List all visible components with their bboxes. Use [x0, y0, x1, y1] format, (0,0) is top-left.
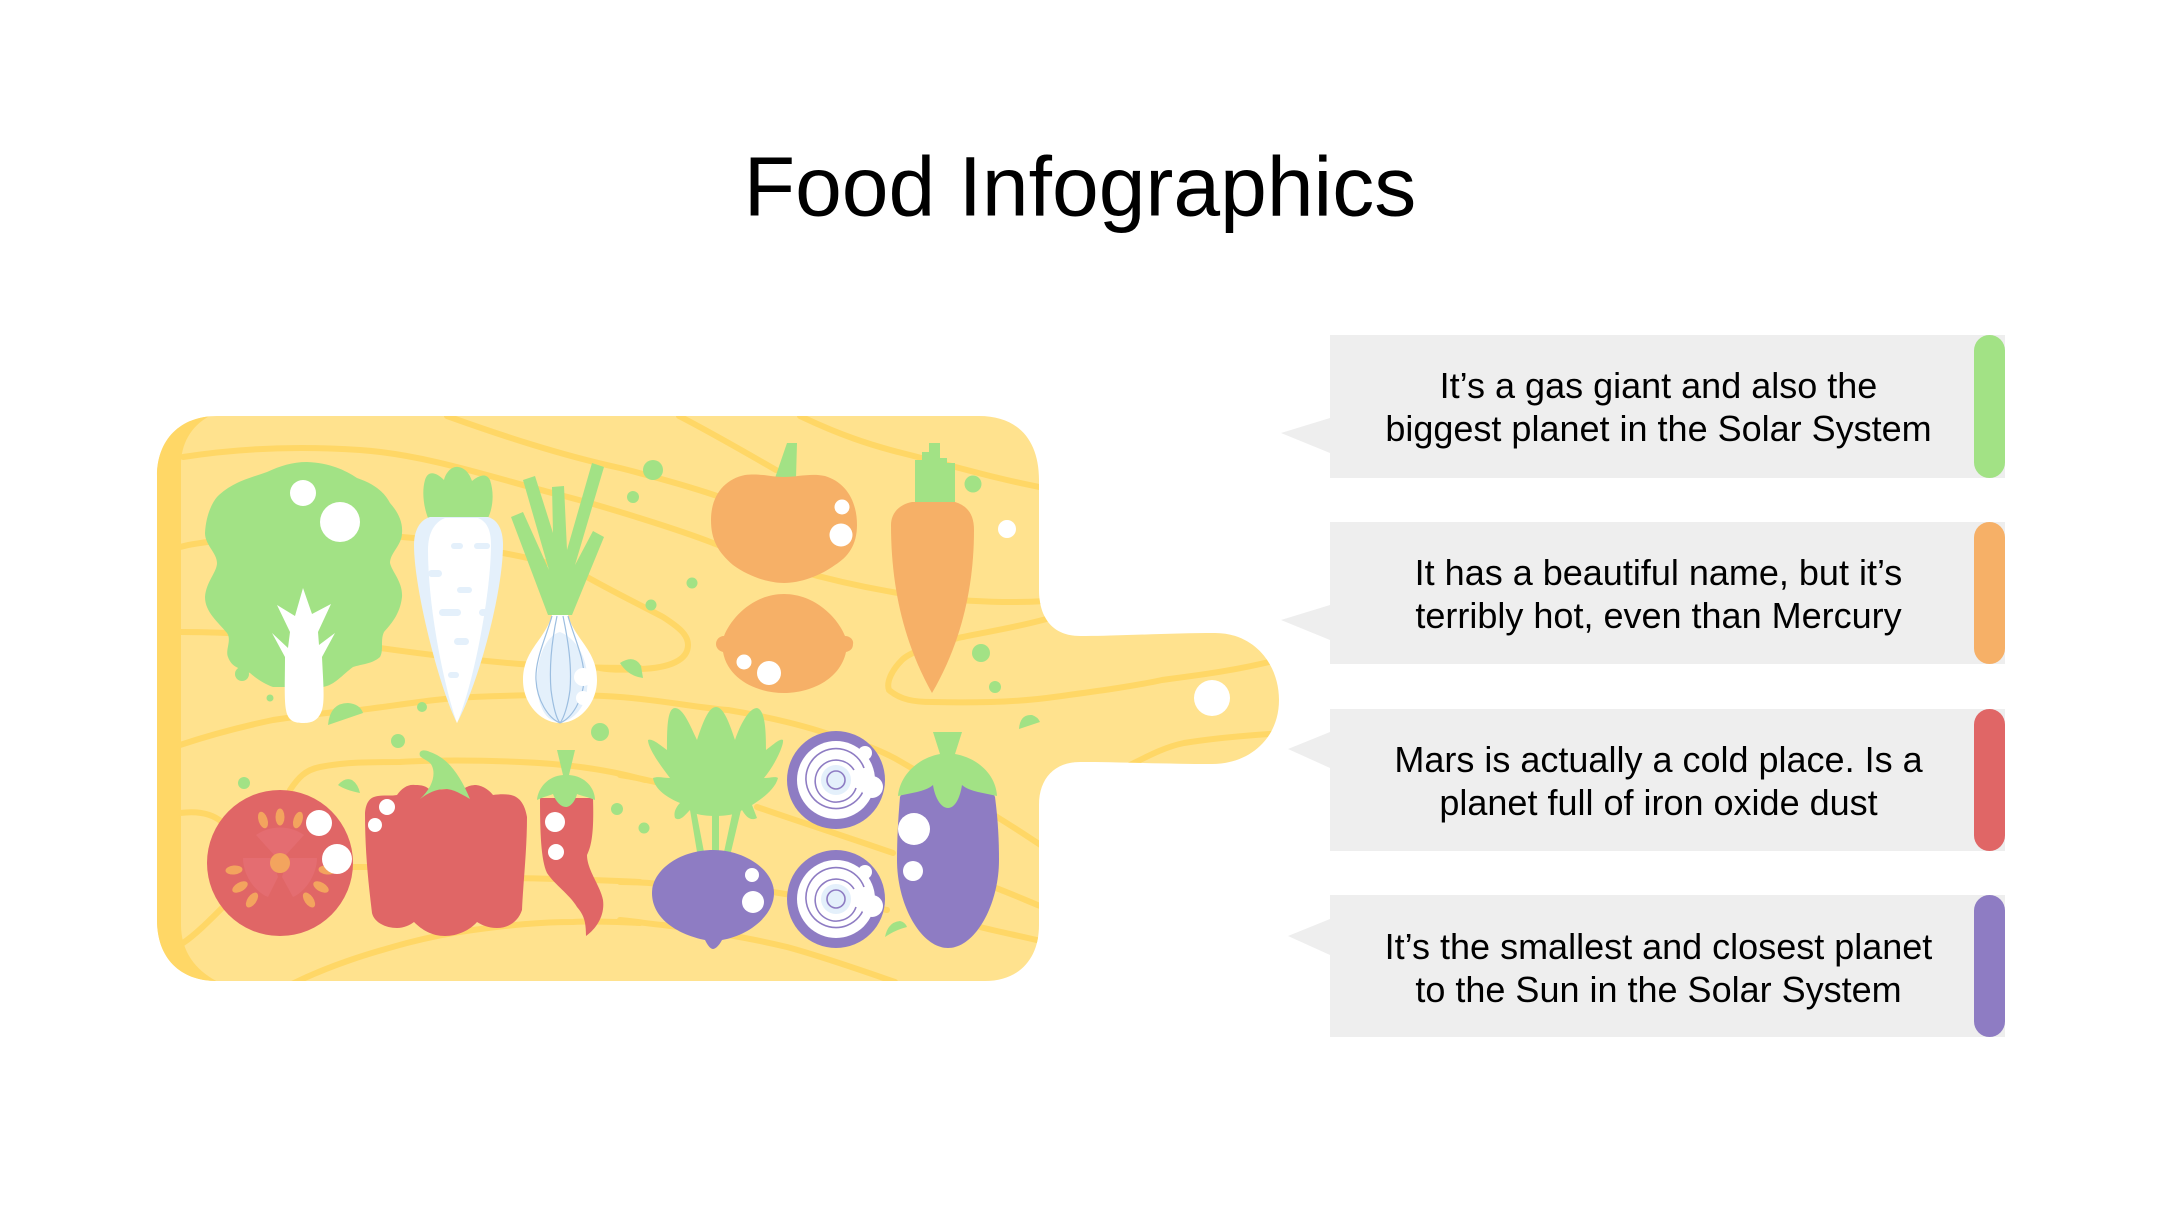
icon: daikon radish [414, 467, 503, 723]
cutting board [150, 410, 1285, 985]
icon: chili pepper [537, 750, 603, 936]
callout: red: planet full of iron oxide dust [1439, 782, 1878, 823]
icon: bell pepper [365, 750, 527, 936]
callout: orange: terribly hot, even than Mercury [1415, 595, 1902, 636]
callout: green: It’s a gas giant and also the [1440, 365, 1877, 406]
callout: green: biggest planet in the Solar System [1385, 408, 1932, 449]
icon: lettuce [205, 462, 402, 723]
callout: purple: It’s the smallest and closest planet [1385, 926, 1932, 967]
callout: red: Mars is actually a cold place. Is a [1394, 739, 1924, 780]
icon: red onion slice bottom [787, 850, 885, 948]
callout: orange [1281, 522, 2005, 664]
icon: eggplant [897, 732, 999, 948]
handle hole [1194, 680, 1230, 716]
callout: purple: to the Sun in the Solar System [1415, 969, 1902, 1010]
icon: turnip [648, 707, 783, 949]
icon: carrot [891, 443, 974, 693]
callout: red [1288, 709, 2005, 851]
callout: purple [1288, 895, 2005, 1037]
icon: red onion slice top [787, 731, 885, 829]
icon: lemon [716, 594, 853, 693]
crumbs: scattered green dots and leaves [235, 460, 1040, 937]
icon: orange fruit [711, 443, 857, 583]
icon: spring onion [511, 463, 604, 723]
callout: green [1281, 335, 2005, 478]
title: Food Infographics [744, 140, 1416, 234]
icon: tomato [207, 790, 353, 936]
callout: orange: It has a beautiful name, but it’s [1415, 552, 1902, 593]
